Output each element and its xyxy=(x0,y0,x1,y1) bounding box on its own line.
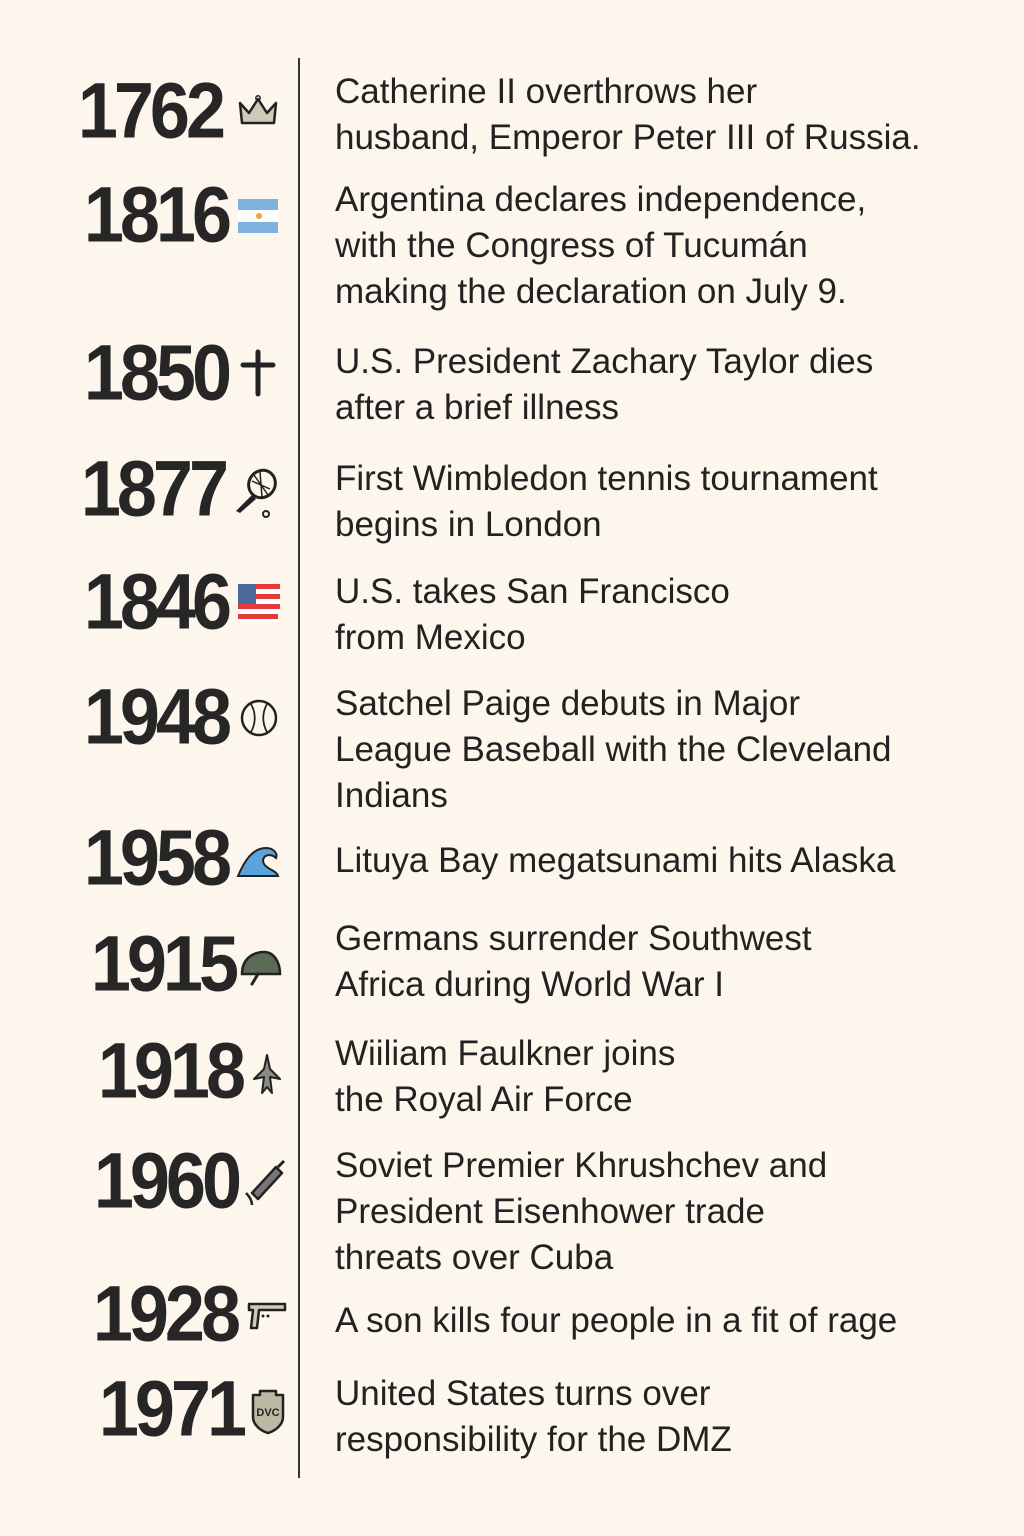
text xyxy=(335,1374,732,1459)
text: Indians xyxy=(335,776,448,815)
text: Africa during World War I xyxy=(335,965,724,1004)
entry 1948 xyxy=(84,673,892,815)
text: making the declaration on July 9. xyxy=(335,272,847,311)
text: A son kills four people in a fit of rage xyxy=(335,1301,897,1340)
text: with the Congress of Tucumán xyxy=(335,226,808,265)
entry 1915 xyxy=(91,919,812,1008)
timeline line xyxy=(298,58,300,1478)
text: responsibility for the DMZ xyxy=(335,1420,732,1459)
entry 1918 xyxy=(98,1027,675,1119)
text: the Royal Air Force xyxy=(335,1080,633,1119)
text: U.S. President Zachary Taylor dies xyxy=(335,342,873,381)
year 1846: 1846 xyxy=(84,558,228,646)
text: Lituya Bay megatsunami hits Alaska xyxy=(335,841,895,880)
icon: crown xyxy=(238,95,278,124)
text: League Baseball with the Cleveland xyxy=(335,730,892,769)
year 1971: 1971 xyxy=(99,1365,243,1453)
text xyxy=(335,919,812,1004)
icon: wave xyxy=(236,847,280,877)
entry 1928 xyxy=(93,1270,897,1358)
text: Argentina declares independence, xyxy=(335,180,866,219)
text xyxy=(335,459,878,544)
entry 1850 xyxy=(84,329,873,427)
entry 1846 xyxy=(84,558,730,657)
icon: plane xyxy=(253,1054,281,1094)
entry 1877 xyxy=(81,445,878,544)
text xyxy=(335,572,730,657)
icon: baseball xyxy=(240,700,278,736)
year 1958: 1958 xyxy=(84,814,228,902)
text xyxy=(335,1146,827,1277)
icon: missile xyxy=(245,1160,285,1205)
year 1850: 1850 xyxy=(84,329,228,417)
icon: DVC badge xyxy=(252,1390,284,1434)
text: threats over Cuba xyxy=(335,1238,613,1277)
entry 1816 xyxy=(84,171,866,311)
text: First Wimbledon tennis tournament xyxy=(335,459,878,498)
text: from Mexico xyxy=(335,618,526,657)
text: Satchel Paige debuts in Major xyxy=(335,684,800,723)
text: husband, Emperor Peter III of Russia. xyxy=(335,118,921,157)
entry 1960 xyxy=(94,1137,827,1277)
icon: tennis racket xyxy=(236,468,277,518)
text: after a brief illness xyxy=(335,388,619,427)
text xyxy=(335,72,921,157)
text: Germans surrender Southwest xyxy=(335,919,812,958)
icon: argentina flag xyxy=(238,199,278,233)
year 1816: 1816 xyxy=(84,171,228,259)
year 1762: 1762 xyxy=(78,67,222,155)
icon: DVC badge: DVC xyxy=(256,1407,280,1419)
text: begins in London xyxy=(335,505,602,544)
text xyxy=(335,342,873,427)
entry 1762 xyxy=(78,67,921,157)
icon: gun xyxy=(248,1302,286,1330)
year 1877: 1877 xyxy=(81,445,225,533)
entry 1958 xyxy=(84,814,896,902)
entry 1971 xyxy=(99,1365,732,1459)
year 1928: 1928 xyxy=(93,1270,237,1358)
year 1948: 1948 xyxy=(84,673,228,761)
text: Wiiliam Faulkner joins xyxy=(335,1034,675,1073)
text: United States turns over xyxy=(335,1374,710,1413)
text xyxy=(335,1034,675,1119)
year 1915: 1915 xyxy=(91,920,235,1008)
icon: US flag xyxy=(238,584,280,622)
year 1918: 1918 xyxy=(98,1027,242,1115)
text xyxy=(335,684,892,815)
text: President Eisenhower trade xyxy=(335,1192,765,1231)
text: Catherine II overthrows her xyxy=(335,72,757,111)
year 1960: 1960 xyxy=(94,1137,238,1225)
text xyxy=(335,180,866,311)
icon: cross xyxy=(240,350,276,396)
text: Soviet Premier Khrushchev and xyxy=(335,1146,827,1185)
text: U.S. takes San Francisco xyxy=(335,572,730,611)
icon: helmet xyxy=(240,950,282,986)
